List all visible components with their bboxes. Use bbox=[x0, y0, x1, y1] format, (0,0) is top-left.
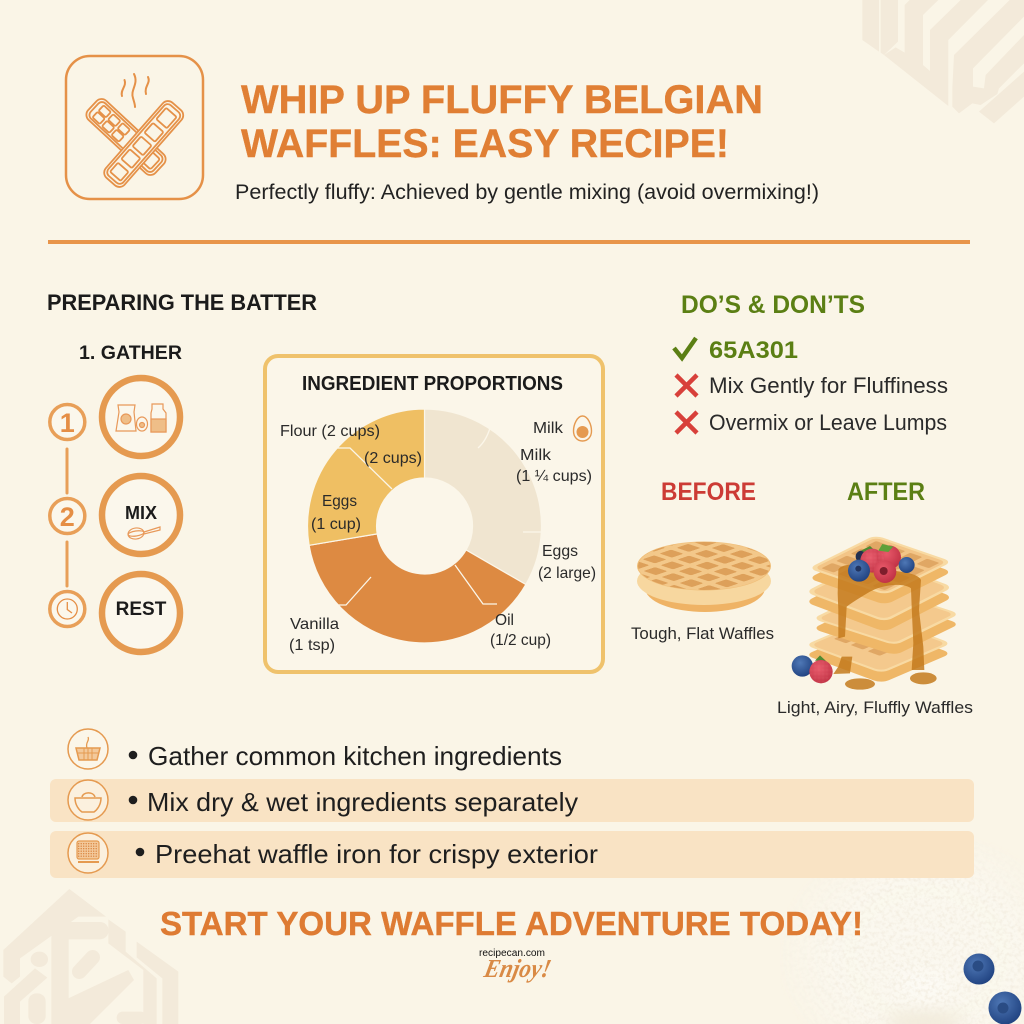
chart labels: Eggs bbox=[542, 543, 578, 560]
steam lines bbox=[122, 74, 149, 107]
berries on top bbox=[848, 544, 915, 583]
icon: waffle iron bbox=[68, 833, 108, 873]
chart labels: (2 cups) bbox=[364, 450, 422, 467]
chart labels: Eggs bbox=[322, 493, 357, 510]
step circle: gather ingredients bbox=[102, 378, 180, 456]
decoration: blueberries bbox=[964, 954, 1022, 1024]
donut chart bbox=[307, 409, 541, 643]
icon: bowl bbox=[68, 780, 108, 820]
tip row 3: preheat bbox=[50, 831, 974, 878]
do item: 65A301 bbox=[709, 337, 798, 364]
icon: flour bag, egg, milk bottle bbox=[116, 404, 166, 432]
bullet text: Gather common kitchen ingredients bbox=[148, 741, 562, 771]
subtitle: Perfectly fluffy: Achieved by gentle mixing (avoid overmixing!) bbox=[235, 180, 819, 204]
chart labels: (1 tsp) bbox=[289, 637, 335, 654]
chart labels: Milk bbox=[533, 420, 564, 437]
don't item 2: Overmix or Leave Lumps bbox=[709, 410, 947, 435]
bottom waffle bbox=[805, 615, 952, 683]
source credit: recipecan.com bbox=[479, 948, 545, 959]
connector lines bbox=[66, 449, 68, 586]
bullet text: Preehat waffle iron for crispy exterior bbox=[155, 839, 598, 869]
don't item 1: Mix Gently for Fluffiness bbox=[709, 373, 948, 398]
chart labels: Milk bbox=[520, 447, 552, 464]
caption: light airy fluffy waffles: Light, Airy, Fluffly Waffles bbox=[777, 698, 973, 717]
leader lines bbox=[327, 427, 553, 605]
bullet text: Mix dry & wet ingredients separately bbox=[147, 787, 578, 817]
step heading: 1. gather: 1. GATHER bbox=[79, 343, 182, 364]
step timeline bbox=[50, 404, 85, 626]
illustration: flat waffle bbox=[637, 542, 771, 612]
front waffle strip bbox=[101, 98, 186, 190]
icon: green check bbox=[674, 338, 696, 358]
watermark: bottom left pattern bbox=[3, 889, 178, 1024]
chart labels: Vanilla bbox=[290, 616, 339, 633]
berries at base bbox=[792, 655, 833, 683]
step circle: mix bbox=[102, 476, 180, 554]
third waffle bbox=[812, 587, 960, 655]
rear waffle strip bbox=[83, 96, 169, 178]
tip row 2: mix bbox=[50, 779, 974, 822]
illustration: fluffy waffle stack with syrup and berries bbox=[792, 535, 960, 690]
icon: basket bbox=[68, 729, 108, 769]
do's and don'ts list bbox=[674, 337, 948, 435]
chart labels: (1 ¼ cups) bbox=[516, 468, 592, 485]
step circle: mix: MIX bbox=[125, 503, 157, 523]
step marker 2 bbox=[50, 498, 85, 534]
chart labels bbox=[280, 420, 596, 654]
caption: tough flat waffles: Tough, Flat Waffles bbox=[631, 625, 774, 643]
enjoy script: Enjoy! bbox=[481, 954, 554, 983]
after label: AFTER bbox=[847, 478, 925, 506]
step circle: rest: REST bbox=[116, 599, 167, 620]
chart labels: Flour (2 cups) bbox=[280, 423, 380, 440]
step marker 1 bbox=[50, 404, 85, 440]
step circle: rest bbox=[102, 574, 180, 652]
chart labels: Oil bbox=[495, 612, 514, 629]
top waffle bbox=[808, 535, 952, 605]
syrup bbox=[833, 564, 937, 690]
icon: egg bbox=[574, 416, 592, 441]
icon: red cross bbox=[676, 412, 697, 433]
call to action: START YOUR WAFFLE ADVENTURE TODAY! bbox=[160, 905, 863, 942]
icon: waffles with steam in rounded frame bbox=[66, 56, 203, 199]
heading: do's and don'ts: DO’S & DON’TS bbox=[681, 291, 865, 319]
title: WAFFLES: EASY RECIPE! bbox=[241, 122, 729, 166]
title bbox=[241, 78, 763, 166]
second waffle bbox=[805, 557, 953, 632]
step marker 2: 2 bbox=[60, 502, 75, 532]
title: WHIP UP FLUFFY BELGIAN bbox=[241, 78, 763, 122]
before label: BEFORE bbox=[661, 478, 756, 506]
chart labels: (2 large) bbox=[538, 565, 596, 582]
flour dusting: bottom right bbox=[884, 926, 966, 1024]
watermark: top right pattern bbox=[862, 0, 1024, 123]
step marker: clock bbox=[50, 592, 85, 626]
heading: preparing the batter: PREPARING THE BATTER bbox=[47, 290, 317, 315]
chart labels: (1/2 cup) bbox=[490, 632, 551, 649]
step marker 1: 1 bbox=[60, 408, 75, 438]
panel: ingredient proportions bbox=[265, 356, 603, 672]
icon: whisk bbox=[127, 527, 160, 540]
panel heading: INGREDIENT PROPORTIONS bbox=[302, 373, 563, 395]
icon: red cross bbox=[676, 375, 697, 396]
tip row 1: gather bbox=[68, 729, 562, 771]
chart labels: (1 cup) bbox=[311, 516, 361, 533]
